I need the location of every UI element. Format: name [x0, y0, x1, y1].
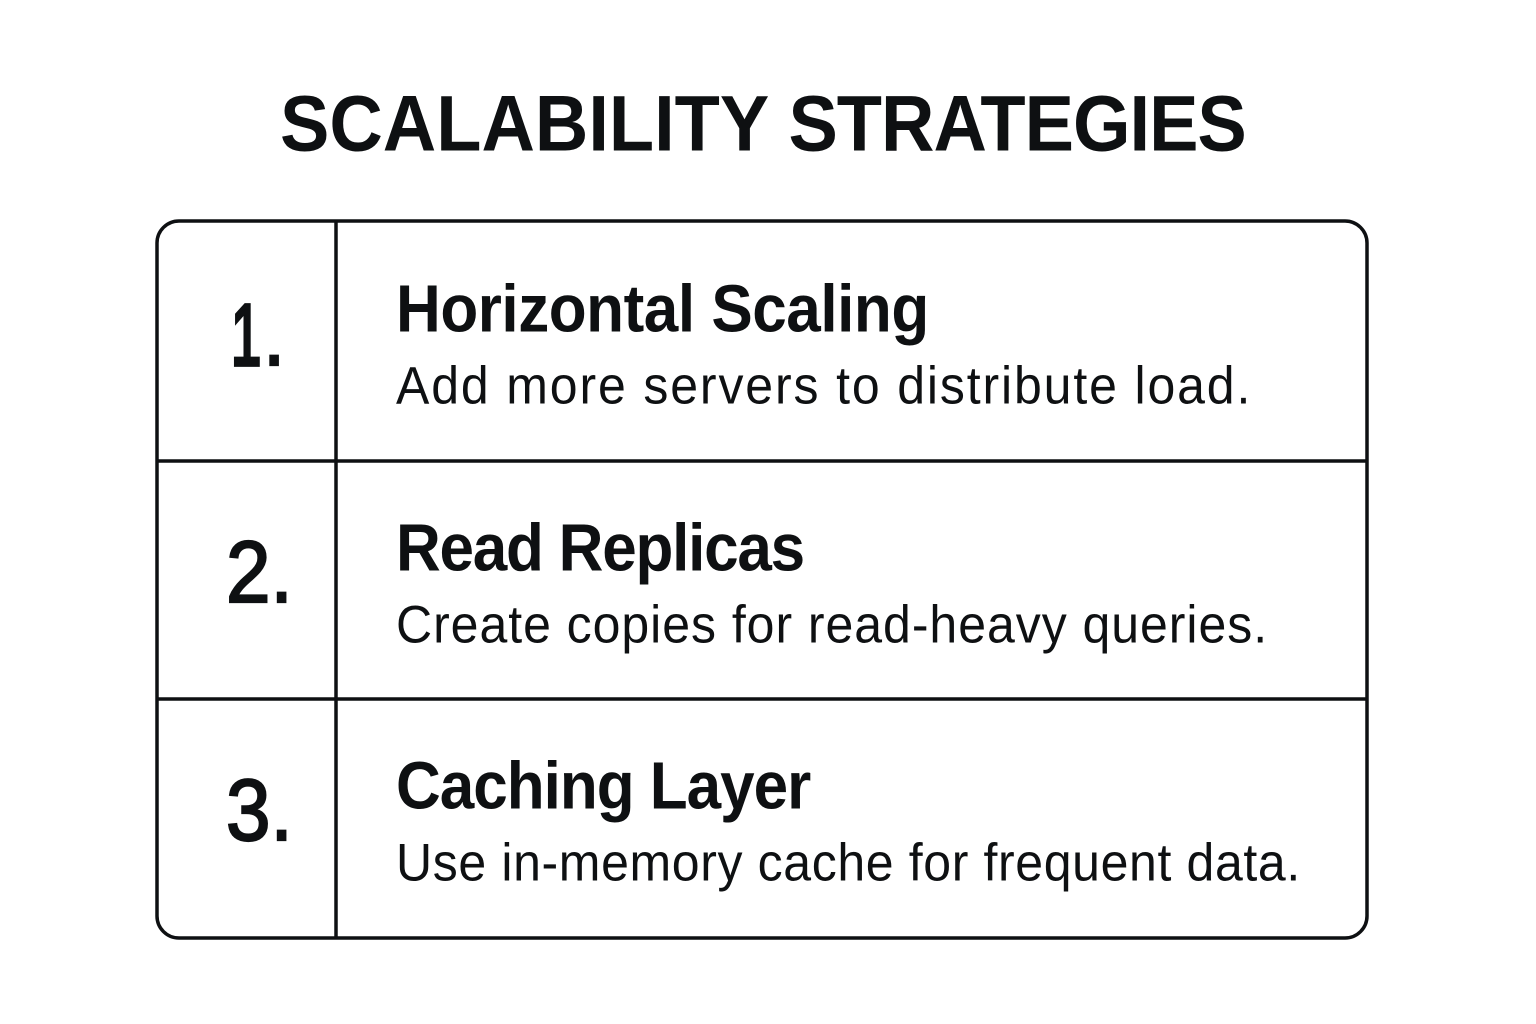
title: SCALABILITY STRATEGIES — [280, 78, 1246, 167]
table grid — [155, 219, 1369, 940]
row 3 heading: Caching Layer — [396, 750, 810, 824]
row 2 heading: Read Replicas — [396, 512, 804, 586]
row 3 number: 3. — [226, 762, 293, 859]
row 1 number: . — [263, 286, 285, 383]
row 2 number: 2. — [226, 524, 293, 621]
row 1 number — [231, 286, 285, 383]
row 3 description: Use in-memory cache for frequent data. — [396, 833, 1301, 892]
row 1 description: Add more servers to distribute load. — [396, 356, 1252, 415]
table panel — [155, 219, 1369, 940]
row 1 number: 1 — [231, 286, 261, 383]
row 1 heading: Horizontal Scaling — [396, 273, 929, 347]
row 2 description: Create copies for read-heavy queries. — [396, 595, 1268, 654]
